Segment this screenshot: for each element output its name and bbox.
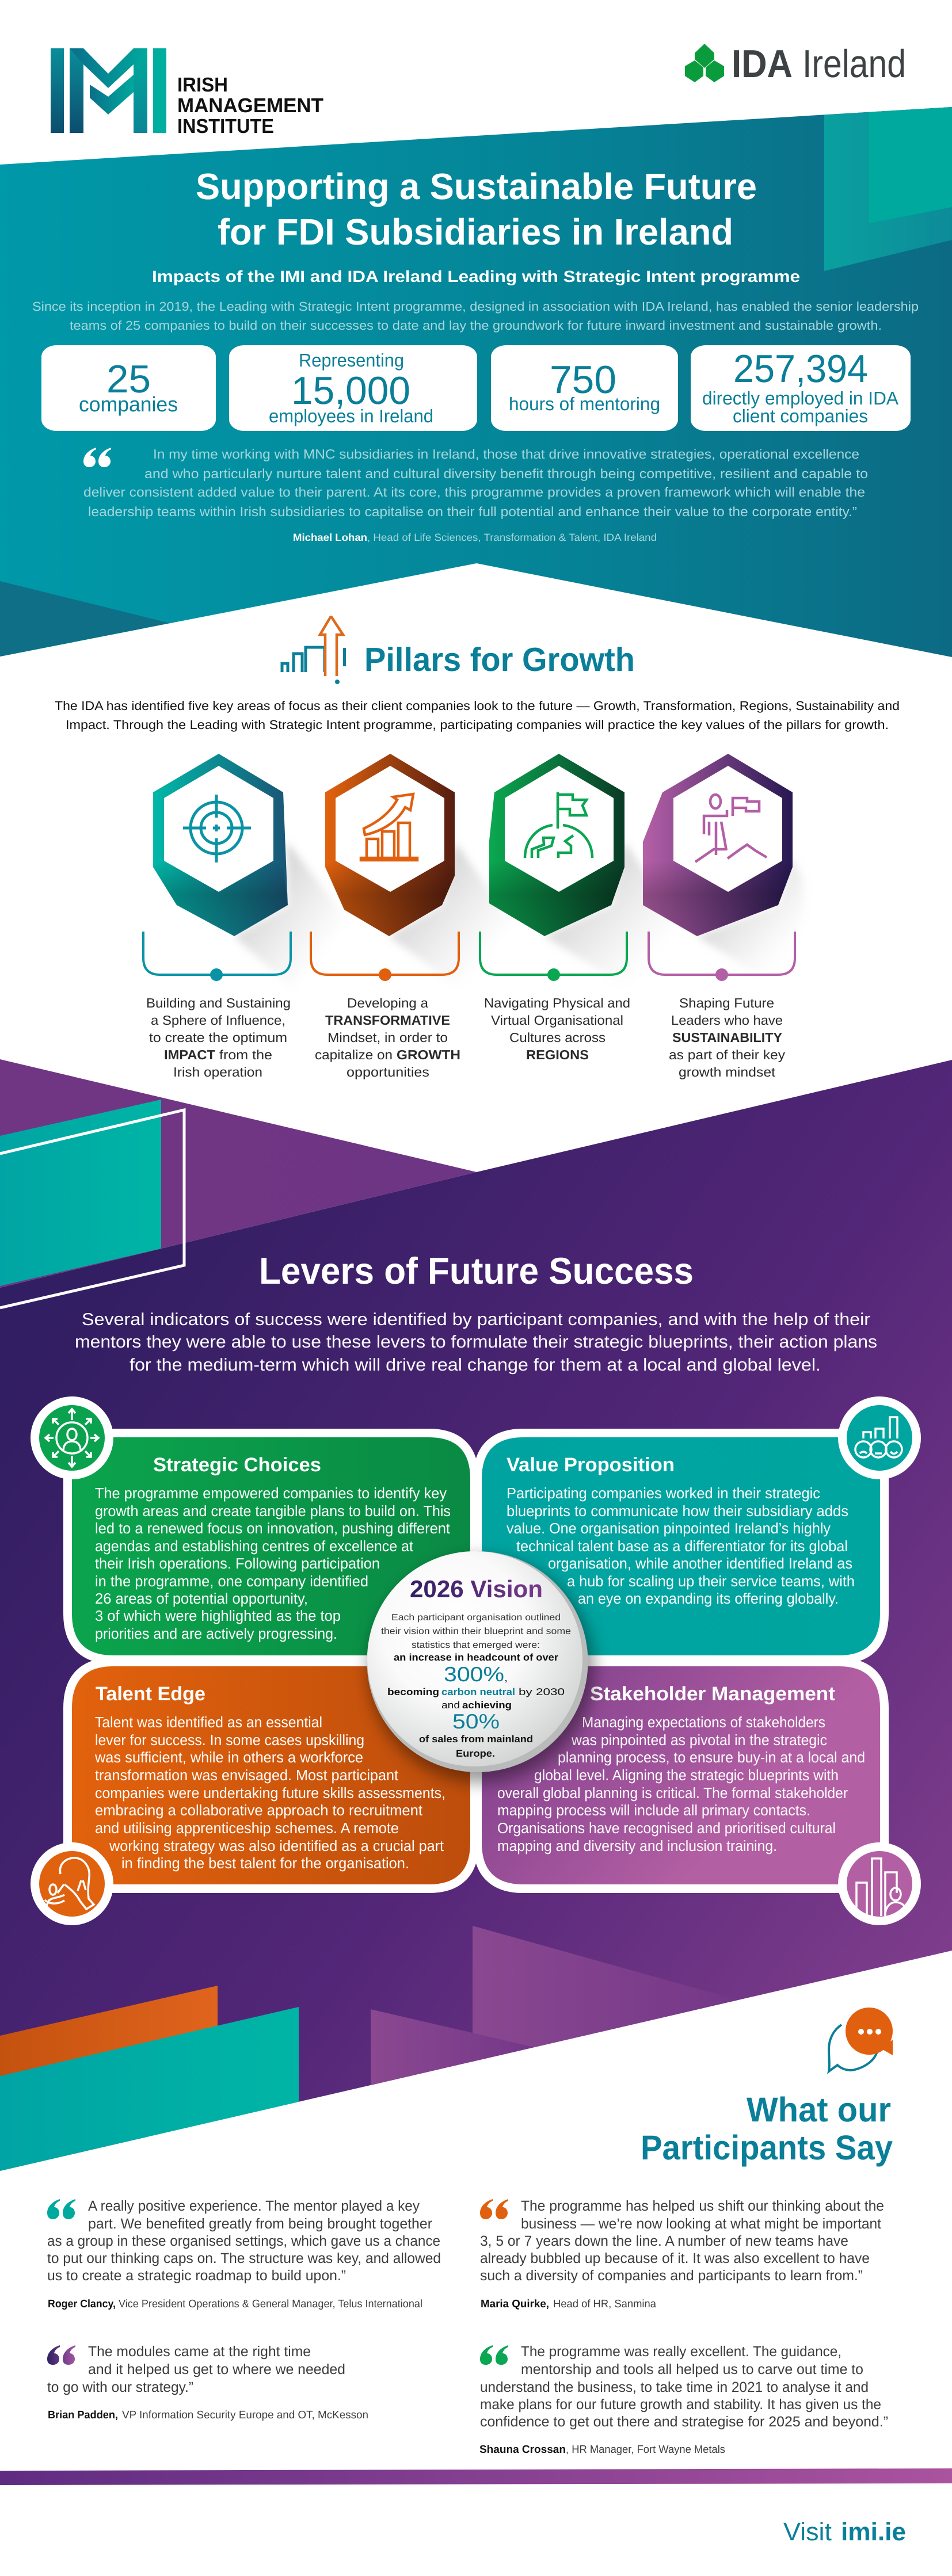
- panel: Talent Edge: was sufficient, while in others a workforce: [94, 1749, 363, 1766]
- panel: Stakeholder Management: [482, 1666, 880, 1884]
- stat card: 15,000 employees: [229, 345, 477, 431]
- shadow under 2026 vision disc: [368, 1557, 594, 1783]
- logo: IDA Ireland: [685, 42, 906, 86]
- subtitle: Impacts of the IMI and IDA Ireland Leading with Strategic Intent programme: [152, 268, 800, 285]
- testimonial: Brian Padden: Brian Padden,: [48, 2409, 118, 2421]
- icon: pillars growth arrow and bars: [282, 616, 346, 684]
- pillar 4: sustainability hexagon with climber icon: [643, 754, 793, 936]
- testimonial: Maria Quirke: business — we’re now looking at what might be important: [521, 2216, 881, 2232]
- pillar 2 caption: Developing a: [347, 995, 428, 1010]
- panel: Strategic Choices: growth areas and create tangible plans to build on. This: [95, 1502, 451, 1520]
- pillar 3 caption: Navigating Physical and: [484, 995, 630, 1010]
- panel: Strategic Choices: 3 of which were highlighted as the top: [95, 1607, 341, 1624]
- panel: Stakeholder Management: global level. Aligning the strategic blueprints with: [534, 1766, 839, 1784]
- testimonial: Maria Quirke: Maria Quirke,: [481, 2298, 549, 2310]
- pillar 4 caption: Shaping Future: [679, 995, 774, 1010]
- pillar 4 caption: SUSTAINABILITY: [672, 1030, 782, 1045]
- heading: Levers of Future Success: Levers of Future Success: [259, 1250, 694, 1292]
- panel: Strategic Choices: Strategic Choices: [153, 1454, 321, 1476]
- callout: 2026 Vision disc: an increase in headcount of over: [394, 1652, 558, 1663]
- testimonial: Roger Clancy: [47, 2198, 441, 2310]
- pillar 4 caption: as part of their key: [669, 1047, 786, 1062]
- stat card: 15,000 employees: employees in Ireland: [269, 406, 433, 426]
- testimonial: Shauna Crossan: [479, 2344, 888, 2456]
- panel: Talent Edge: embracing a collaborative approach to recruitment: [95, 1802, 423, 1819]
- bracket 4 purple: [649, 932, 795, 981]
- testimonial: Shauna Crossan: Shauna Crossan: [479, 2444, 566, 2456]
- stat card: 15,000 employees: Representing: [299, 350, 404, 371]
- panel: Strategic Choices: The programme empowered companies to identify key: [95, 1484, 447, 1502]
- testimonial: Brian Padden: VP Information Security Europe and OT, McKesson: [122, 2409, 368, 2421]
- quote: Michael Lohan: In my time working with MNC subsidiaries in Ireland, those that drive innovative strategies, operational excellence: [153, 446, 859, 461]
- callout: 2026 Vision disc: Each participant organisation outlined: [391, 1613, 561, 1623]
- panel: Strategic Choices: their Irish operations. Following participation: [95, 1555, 380, 1572]
- panel: Value Proposition: blueprints to communicate how their subsidiary adds: [507, 1502, 848, 1520]
- callout: 2026 Vision disc: carbon neutral: [441, 1686, 515, 1697]
- icon: stakeholder bars and person: [838, 1842, 921, 1925]
- title: [196, 166, 757, 253]
- pillar 2 caption: [315, 995, 460, 1079]
- footer link text: Visit: [783, 2518, 832, 2546]
- stat card: 750 hours: hours of mentoring: [509, 394, 660, 414]
- callout: 2026 Vision disc: becoming: [387, 1686, 439, 1697]
- pillar 1 caption: Irish operation: [173, 1064, 262, 1079]
- bracket 1 teal: [143, 932, 291, 981]
- intro text: teams of 25 companies to build on their successes to date and lay the groundwork for future inward investment and sustainable growth.: [70, 318, 882, 333]
- bracket 2 orange: [311, 932, 459, 981]
- stat card: 25 companies: companies: [79, 392, 178, 416]
- testimonial: Brian Padden: to go with our strategy.”: [47, 2379, 193, 2395]
- panel: Stakeholder Management: was pinpointed as pivotal in the strategic: [571, 1731, 827, 1749]
- testimonial: Roger Clancy: Vice President Operations & General Manager, Telus International: [119, 2298, 422, 2310]
- panel: Stakeholder Management: planning process, to ensure buy-in at a local and: [558, 1749, 865, 1766]
- testimonial: Maria Quirke: [480, 2198, 884, 2310]
- pillars intro text: Impact. Through the Leading with Strategic Intent programme, participating companies will practice the key values of the pillars for growth.: [66, 718, 889, 732]
- pillar 1: impact hexagon with target icon: [153, 754, 288, 936]
- panel: Value Proposition: Value Proposition: [507, 1454, 675, 1476]
- logo: Irish Management Institute: IRISH: [177, 74, 228, 96]
- panel: Talent Edge: [72, 1666, 470, 1884]
- icon: speech bubbles: [829, 2008, 893, 2071]
- panel: Stakeholder Management: mapping process will include all primary contacts.: [497, 1802, 810, 1819]
- testimonial: Roger Clancy: Roger Clancy,: [48, 2298, 116, 2310]
- panel: Value Proposition: an eye on expanding its offering globally.: [578, 1590, 839, 1607]
- levers intro text: [75, 1310, 877, 1375]
- pillar 1 caption: [146, 995, 291, 1079]
- pillar 2 caption: TRANSFORMATIVE: [325, 1013, 450, 1028]
- levers intro text: Several indicators of success were identified by participant companies, and with the help of their: [82, 1310, 870, 1329]
- callout: 2026 Vision disc: 300%: [444, 1662, 504, 1686]
- panel: Value Proposition: [482, 1437, 880, 1655]
- panel: Value Proposition: Participating companies worked in their strategic: [507, 1484, 820, 1502]
- pillar 3 caption: Cultures across: [509, 1030, 606, 1045]
- icon: strategic choices person with arrows: [31, 1396, 113, 1479]
- panel: Talent Edge: in finding the best talent for the organisation.: [121, 1854, 409, 1872]
- panel: Strategic Choices: in the programme, one company identified: [95, 1573, 368, 1590]
- panel: teal hero background: [0, 107, 952, 657]
- panel: Talent Edge: transformation was envisaged. Most participant: [95, 1766, 399, 1784]
- pillar 3 caption: REGIONS: [526, 1047, 589, 1062]
- panel: Value Proposition: organisation, while another identified Ireland as: [548, 1555, 852, 1572]
- testimonial: Shauna Crossan: make plans for our future growth and stability. It has given us the: [480, 2396, 881, 2413]
- callout: 2026 Vision disc: 50%: [452, 1709, 500, 1733]
- stat card: 257,394 employed: 257,394: [733, 347, 868, 391]
- bracket 3 green: [480, 932, 627, 981]
- quote: Michael Lohan: deliver consistent added value to their parent. At its core, this programme provides a proven framework which will enable the: [83, 484, 865, 499]
- callout: 2026 Vision disc: achieving: [462, 1700, 512, 1711]
- testimonial: Brian Padden: The modules came at the right time: [88, 2344, 311, 2360]
- callout: 2026 Vision disc: ,: [504, 1673, 508, 1684]
- pillars intro text: [55, 699, 900, 732]
- pillar 2 caption: opportunities: [346, 1064, 429, 1079]
- panel: Stakeholder Management: Stakeholder Management: [590, 1683, 835, 1705]
- pillar 2 caption: GROWTH: [397, 1047, 460, 1062]
- callout: 2026 Vision disc: their vision within their blueprint and some: [381, 1627, 571, 1636]
- testimonial: Shauna Crossan: mentorship and tools all helped us to carve out time to: [521, 2361, 863, 2377]
- pillar 4 caption: [669, 995, 786, 1079]
- heading: Pillars for Growth: Pillars for Growth: [364, 641, 635, 678]
- testimonial: Roger Clancy: us to create a strategic roadmap to build upon.”: [47, 2268, 346, 2284]
- testimonial: Roger Clancy: A really positive experience. The mentor played a key: [88, 2198, 420, 2214]
- testimonial: Maria Quirke: 3, 5 or 7 years down the line. A number of new teams have: [480, 2233, 848, 2249]
- testimonial: Roger Clancy: part. We benefited greatly from being brought together: [88, 2216, 432, 2232]
- callout: 2026 Vision disc: [367, 1551, 588, 1772]
- quote: Michael Lohan: [83, 446, 868, 543]
- stat card: 15,000 employees: 15,000: [291, 369, 410, 413]
- title: for FDI Subsidiaries in Ireland: [218, 211, 733, 253]
- white frame behind lever cards: [72, 1437, 880, 1884]
- panel: Talent Edge: working strategy was also identified as a crucial part: [109, 1837, 444, 1854]
- panel: Talent Edge: Talent Edge: [96, 1683, 205, 1705]
- panel: Stakeholder Management: overall global planning is critical. The formal stakeholder: [497, 1784, 848, 1802]
- pillar 1 caption: a Sphere of Influence,: [151, 1013, 285, 1028]
- heading: What our Participants Say: [641, 2090, 893, 2167]
- testimonial: Maria Quirke: Head of HR, Sanmina: [553, 2298, 656, 2310]
- testimonial: Roger Clancy: as a group in these organised settings, which gave us a chance: [47, 2233, 440, 2249]
- footer link text: [783, 2518, 906, 2546]
- pillar 3: regions hexagon with flag and globe icon: [489, 754, 624, 936]
- quote: Michael Lohan: Michael Lohan: [293, 532, 367, 543]
- panel: Stakeholder Management: Managing expectations of stakeholders: [582, 1713, 825, 1731]
- panel: Talent Edge: and utilising apprenticeship schemes. A remote: [95, 1819, 399, 1837]
- pillar 1 caption: Building and Sustaining: [146, 995, 291, 1010]
- panel: Strategic Choices: led to a renewed focus on innovation, pushing different: [95, 1520, 451, 1537]
- stat card: 257,394 employed: client companies: [733, 406, 868, 426]
- heading: What our Participants Say: What our: [747, 2090, 891, 2129]
- intro text: Since its inception in 2019, the Leading with Strategic Intent programme, designed in association with IDA Ireland, has enabled the senior leadership: [32, 299, 919, 314]
- pillar 2 caption: capitalize on: [315, 1047, 393, 1062]
- pillar 1 caption: to create the optimum: [149, 1030, 287, 1045]
- panel: Talent Edge: lever for success. In some cases upskilling: [95, 1731, 364, 1749]
- icon: value proposition bars and smileys: [838, 1396, 921, 1479]
- pillar 1 caption: IMPACT: [164, 1047, 215, 1062]
- panel: Talent Edge: Talent was identified as an essential: [95, 1713, 322, 1731]
- stat card: 750 hours: [491, 345, 678, 431]
- logo: IDA Ireland: Ireland: [802, 42, 906, 86]
- testimonial: Maria Quirke: already bubbled up because of it. It was also excellent to have: [480, 2250, 870, 2266]
- panel: Stakeholder Management: Organisations have recognised and prioritised cultural: [497, 1819, 836, 1837]
- logo: Irish Management Institute: [51, 48, 323, 138]
- panel: Talent Edge: companies were undertaking future skills assessments,: [95, 1784, 445, 1802]
- panel: Value Proposition: a hub for scaling up their service teams, with: [567, 1573, 855, 1590]
- quote: Michael Lohan: leadership teams within Irish subsidiaries to capitalise on their full potential and enhance their value to the corporate entity.”: [88, 504, 857, 519]
- panel: Strategic Choices: agendas and establishing centres of excellence at: [95, 1537, 414, 1555]
- testimonial: Shauna Crossan: , HR Manager, Fort Wayne Metals: [566, 2444, 725, 2456]
- stat card: 750 hours: 750: [550, 358, 616, 402]
- testimonial: Maria Quirke: such a diversity of companies and participants to learn from.”: [480, 2268, 863, 2284]
- logo: Irish Management Institute: INSTITUTE: [177, 115, 274, 138]
- pillar shadows: [234, 842, 804, 989]
- stat card: 257,394 employed: [691, 345, 911, 431]
- stat card: 257,394 employed: directly employed in IDA: [702, 388, 899, 409]
- levers intro text: mentors they were able to use these levers to formulate their strategic blueprints, their action plans: [75, 1333, 877, 1352]
- quote: Michael Lohan: and who particularly nurture talent and cultural diversity benefit through being competitive, resilient and capable to: [144, 466, 868, 481]
- testimonial: Shauna Crossan: confidence to get out there and strategise for 2025 and beyond.”: [480, 2414, 888, 2430]
- footer link text: imi.ie: [841, 2518, 906, 2546]
- quote: Michael Lohan: , Head of Life Sciences, Transformation & Talent, IDA Ireland: [367, 532, 657, 543]
- callout: 2026 Vision disc: Europe.: [456, 1748, 495, 1759]
- callout: 2026 Vision disc: statistics that emerged were:: [412, 1640, 540, 1650]
- levers intro text: for the medium-term which will drive real change for them at a local and global level.: [130, 1356, 821, 1375]
- pillars intro text: The IDA has identified five key areas of focus as their client companies look to the future — Growth, Transformation, Regions, Sustainability and: [55, 699, 900, 713]
- panel: Strategic Choices: priorities and are actively progressing.: [95, 1625, 337, 1642]
- pillar 3 caption: Virtual Organisational: [491, 1013, 623, 1028]
- icon: talent edge light bulb and hand: [31, 1842, 113, 1925]
- panel: Value Proposition: technical talent base as a differentiator for its global: [516, 1537, 848, 1555]
- panel: Strategic Choices: [72, 1437, 470, 1655]
- pillar 2 caption: Mindset, in order to: [328, 1030, 448, 1045]
- callout: 2026 Vision disc: of sales from mainland: [419, 1734, 533, 1745]
- testimonial: Roger Clancy: to put our thinking caps on. The structure was key, and allowed: [47, 2250, 441, 2266]
- pillar 4 caption: growth mindset: [679, 1064, 776, 1079]
- icon: quote mark white: [83, 448, 111, 467]
- footer purple strip: [0, 2468, 952, 2485]
- logo: IDA Ireland: IDA: [732, 42, 793, 86]
- heading: What our Participants Say: Participants Say: [641, 2128, 893, 2167]
- title: Supporting a Sustainable Future: [196, 166, 757, 207]
- testimonial: Shauna Crossan: understand the business, to take time in 2021 to analyse it and: [480, 2379, 869, 2395]
- callout: 2026 Vision disc: by 2030: [519, 1686, 565, 1697]
- pillar 3 caption: [484, 995, 630, 1062]
- panel: Value Proposition: value. One organisation pinpointed Ireland’s highly: [507, 1520, 831, 1537]
- callout: 2026 Vision disc: 2026 Vision: [410, 1575, 543, 1602]
- panel: purple section background: [0, 1059, 952, 2171]
- panel: Stakeholder Management: mapping and diversity and inclusion training.: [497, 1837, 777, 1854]
- logo: Irish Management Institute: MANAGEMENT: [177, 94, 323, 117]
- pillar 2: transformative hexagon with growth icon: [325, 754, 455, 936]
- callout: 2026 Vision disc: and: [441, 1700, 460, 1711]
- testimonial: Maria Quirke: The programme has helped us shift our thinking about the: [521, 2198, 884, 2214]
- testimonial: Brian Padden: and it helped us get to where we needed: [88, 2361, 345, 2377]
- testimonial: Shauna Crossan: The programme was really excellent. The guidance,: [521, 2344, 841, 2360]
- intro text: [32, 299, 919, 333]
- stat card: 25 companies: [41, 345, 216, 431]
- testimonial: Brian Padden: [47, 2344, 368, 2421]
- panel: Strategic Choices: 26 areas of potential opportunity,: [95, 1590, 308, 1607]
- pillar 1 caption: from the: [219, 1047, 272, 1062]
- pillar 4 caption: Leaders who have: [671, 1013, 783, 1028]
- stat card: 25 companies: 25: [106, 357, 151, 401]
